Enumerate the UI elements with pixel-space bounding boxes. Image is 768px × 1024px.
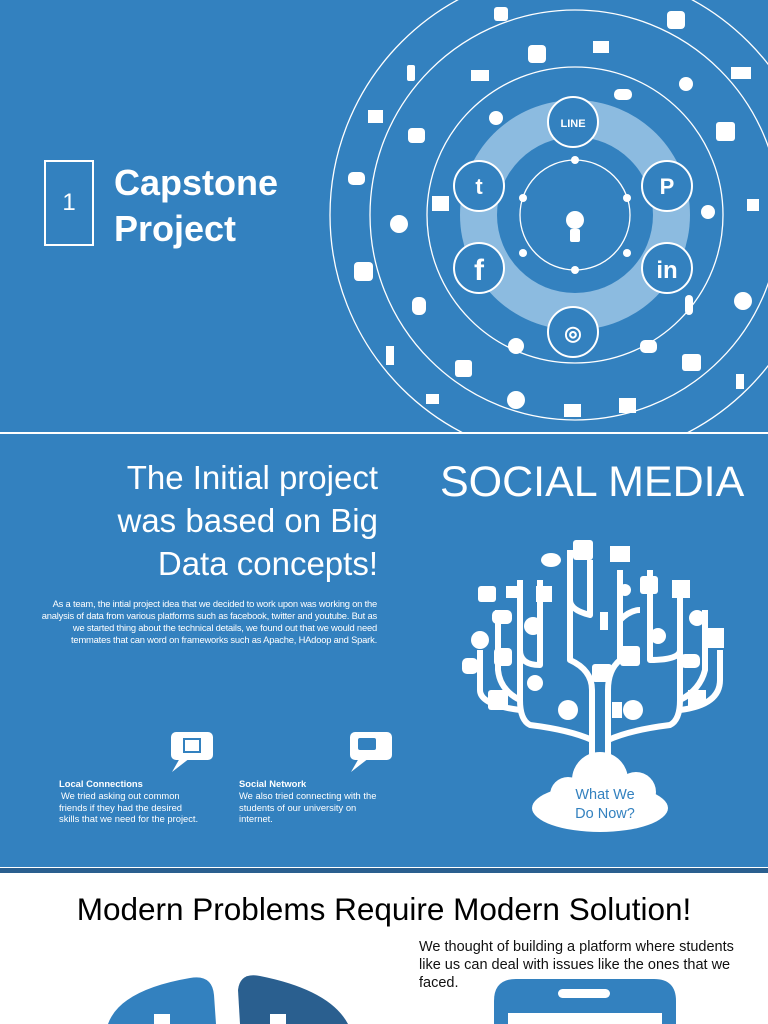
chart: social media tree: Do Now?	[575, 806, 635, 822]
icon: bulb	[566, 211, 584, 242]
chart: concentric social circles	[329, 0, 768, 432]
text block: social network: students of our university on	[239, 802, 356, 813]
icon: social blobs	[108, 975, 348, 1024]
text block: local connections	[59, 778, 198, 824]
heading: social media: SOCIAL MEDIA	[440, 458, 744, 506]
title: Project	[114, 208, 236, 249]
icon: chat callout	[350, 732, 392, 772]
chart: concentric social circles: P	[660, 174, 674, 199]
text block: description: As a team, the intial project idea that we decided to work upon was working on the analysis of data from various platforms such as facebook, twitter and youtube. But as we started thing about the technical details, we found out that we would need temmates that can word on frameworks such as Apache, HAdoop and Spark.	[42, 598, 377, 645]
heading: initial project: The Initial project was based on Big Data concepts!	[117, 459, 378, 582]
text block: platform: We thought of building a platform where students like us can deal with issues like the ones that we faced.	[419, 939, 734, 991]
cloud	[532, 752, 668, 832]
chart: concentric social circles: t	[475, 174, 483, 199]
text block: local connections: We tried asking out common	[61, 790, 180, 801]
icon: phone	[494, 979, 676, 1024]
text block: social network: We also tried connecting with the	[239, 790, 376, 801]
panel: big data intro	[0, 434, 768, 865]
chart: social media tree	[462, 540, 724, 832]
chart: concentric social circles: in	[656, 257, 678, 284]
text block: social network: Social Network	[239, 778, 306, 789]
title	[114, 162, 278, 249]
number box	[44, 160, 94, 246]
number box: 1	[62, 189, 76, 216]
panel: header	[0, 0, 768, 432]
chart: concentric social circles: ◎	[564, 323, 582, 345]
text block: local connections: skills that we need for the project.	[59, 813, 198, 824]
title: Capstone	[114, 162, 278, 203]
icon: book callout	[171, 732, 213, 772]
text block: social network: internet.	[239, 813, 273, 824]
chart: social media tree: What We	[575, 787, 635, 803]
chart: concentric social circles: LINE	[560, 118, 586, 130]
text block: social network	[239, 778, 376, 824]
text block: local connections: Local Connections	[59, 778, 143, 789]
heading: modern problems: Modern Problems Require Modern Solution!	[77, 891, 691, 927]
chart: concentric social circles: f	[474, 254, 485, 287]
text block: local connections: friends if they had the desired	[59, 802, 182, 813]
divider band	[0, 865, 768, 867]
